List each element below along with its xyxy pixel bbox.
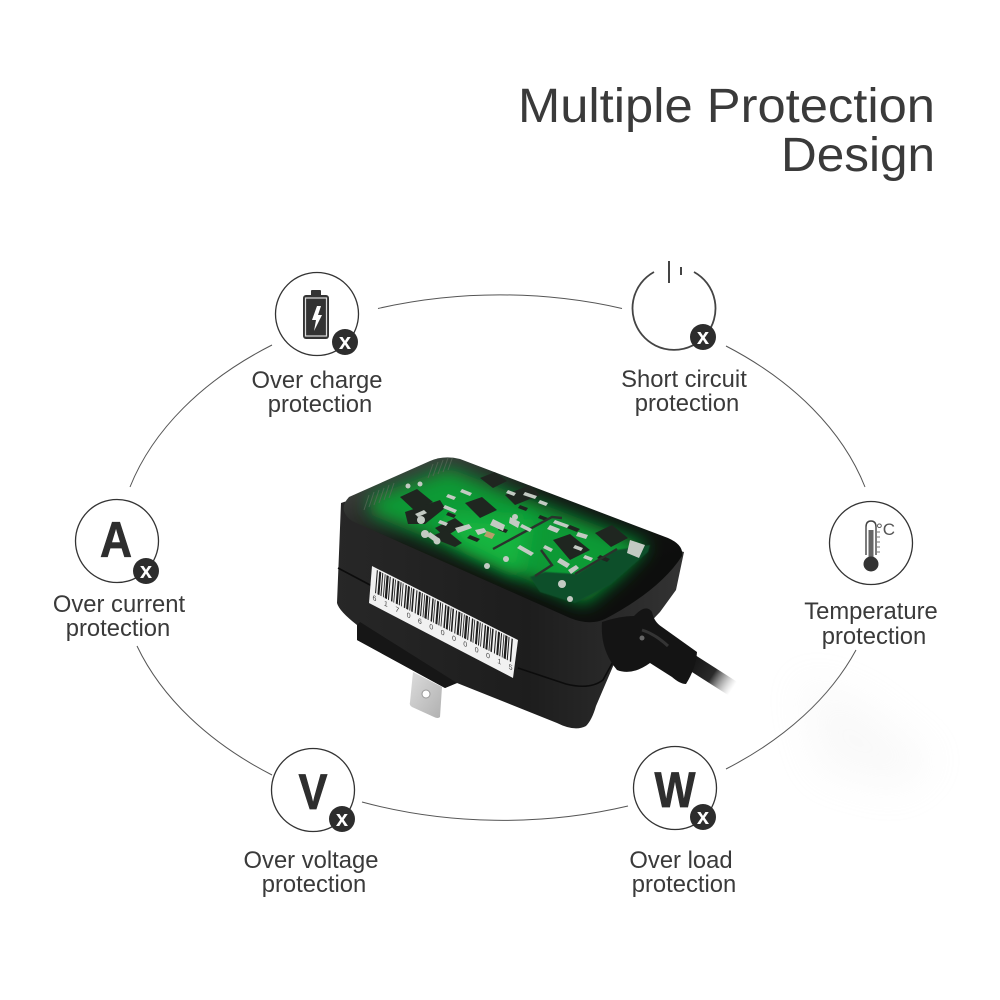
label: protection xyxy=(632,871,736,898)
label: protection xyxy=(822,623,926,650)
label xyxy=(629,847,736,898)
chips xyxy=(400,472,628,562)
label: Short circuit xyxy=(621,366,747,393)
item: over current xyxy=(53,500,186,642)
label: protection xyxy=(635,390,739,417)
item: short circuit xyxy=(621,261,747,417)
item: over load xyxy=(629,746,736,898)
item: over charge xyxy=(252,272,382,418)
icon: thermometer: °C xyxy=(876,520,895,539)
badge: x xyxy=(133,558,159,584)
label xyxy=(244,847,378,898)
label: Over voltage xyxy=(244,847,378,874)
icon: letter W: W xyxy=(654,762,696,818)
barcode bars xyxy=(376,582,512,650)
badge: x xyxy=(690,324,716,350)
label: protection xyxy=(66,615,170,642)
badge: x: x xyxy=(336,806,349,831)
printed circuit board top xyxy=(344,457,682,622)
oval connector ring xyxy=(130,295,865,820)
title: Multiple Protection xyxy=(518,80,935,133)
barcode label xyxy=(369,566,518,678)
label xyxy=(252,367,382,418)
badge: x: x xyxy=(339,329,352,354)
icon: letter V: V xyxy=(298,764,328,820)
icon: power ring xyxy=(632,261,716,350)
adapter body xyxy=(337,470,684,728)
badge: x: x xyxy=(140,558,153,583)
label: Temperature xyxy=(804,598,938,625)
label: Over load xyxy=(629,847,733,874)
label xyxy=(621,366,747,417)
dark copper area xyxy=(530,545,650,603)
barcode digits: 6 1 7 0 6 0 0 0 0 0 0 1 5 xyxy=(372,593,513,672)
tan capacitor xyxy=(484,531,495,539)
label xyxy=(53,591,186,642)
soft floor shadow xyxy=(800,680,935,790)
badge: x: x xyxy=(697,804,710,829)
badge: x xyxy=(332,329,358,355)
icon: letter A: A xyxy=(100,512,132,568)
badge: x xyxy=(690,804,716,830)
icon: battery xyxy=(303,290,329,339)
title: Design xyxy=(781,129,935,182)
label: protection xyxy=(268,391,372,418)
plug blade xyxy=(410,672,442,718)
solder and parts xyxy=(406,482,645,602)
label: Over charge xyxy=(252,367,382,394)
power adapter xyxy=(330,450,735,728)
power cord xyxy=(688,660,735,690)
plug base xyxy=(357,622,457,688)
label xyxy=(804,598,938,650)
label: protection xyxy=(262,871,366,898)
edge pins xyxy=(364,456,453,510)
icon: thermometer xyxy=(864,520,895,572)
slots xyxy=(493,517,617,576)
label: Over current xyxy=(53,591,186,618)
item: temperature xyxy=(804,502,938,650)
strain relief grommet xyxy=(602,608,697,684)
badge: x: x xyxy=(697,324,710,349)
badge: x xyxy=(329,806,355,832)
lid seam xyxy=(338,568,614,686)
title xyxy=(518,80,935,182)
item: over voltage xyxy=(244,748,378,898)
